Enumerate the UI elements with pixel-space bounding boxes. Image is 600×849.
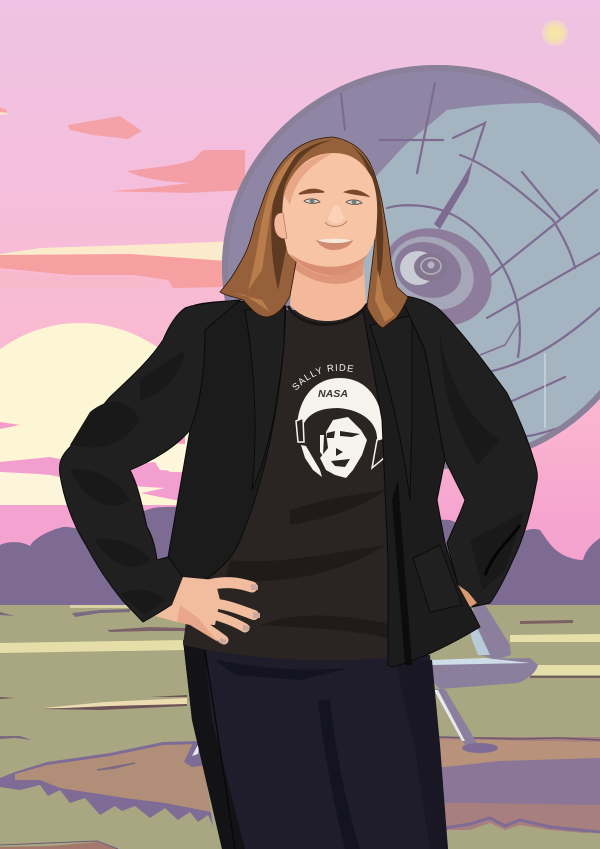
dish legs (434, 689, 477, 745)
helmet right ear muff (372, 438, 384, 468)
dish inner surface (364, 103, 600, 469)
right eyebrow (345, 190, 368, 196)
field stripes and streaks (0, 605, 600, 740)
left ear (274, 213, 287, 239)
trousers centre seam (318, 700, 360, 849)
sun (0, 323, 215, 593)
left eyebrow (299, 189, 324, 194)
jacket right lapel (370, 315, 412, 500)
portrait lower highlights (301, 435, 324, 477)
grass field (0, 605, 600, 849)
nose (328, 205, 344, 223)
shirt folds (225, 490, 395, 640)
jacket right front panel (362, 295, 480, 667)
t-shirt (183, 310, 397, 660)
hair highlights (232, 150, 395, 322)
trousers side panel (183, 640, 245, 849)
hair shadow strands (271, 140, 383, 290)
left hand on hip (155, 577, 260, 644)
finger nails (219, 584, 260, 644)
left eye (304, 199, 320, 203)
icon: pale moon (542, 20, 568, 46)
helmet dome (297, 378, 383, 465)
shirt text: SALLY RIDE (296, 371, 356, 391)
jacket left body panel (168, 301, 286, 590)
trousers (183, 640, 448, 849)
dish centre feed (390, 228, 492, 325)
t-shirt collar (288, 304, 367, 324)
jacket left lapel (245, 308, 285, 490)
distant tree line (0, 507, 600, 610)
soil patch left (0, 741, 213, 849)
helmet left ear muff (296, 418, 304, 442)
horizon cloud bands (0, 422, 200, 560)
dish foot (462, 743, 498, 753)
hair (220, 137, 408, 328)
jacket pocket (413, 545, 462, 612)
left foot of mount (184, 740, 207, 767)
dish base bowl (430, 658, 538, 689)
mouth (316, 238, 353, 250)
shirt graphic: Sally Ride NASA helmet (292, 364, 384, 478)
dish rings and struts (340, 82, 600, 438)
right hand tucked at hip (458, 585, 477, 607)
jacket right sleeve (400, 295, 537, 607)
right eye (346, 200, 362, 204)
neck shadow under chin (290, 250, 365, 284)
shirt text: NASA worm logo: NASA (318, 389, 348, 400)
neck (290, 255, 366, 321)
face (274, 153, 377, 276)
jacket left sleeve (59, 300, 240, 622)
portrait facial shadows (327, 431, 360, 467)
shirt graphic: Sally Ride NASA helmet: SALLY RIDE (292, 364, 354, 390)
portrait face (320, 417, 367, 478)
dish yoke arm (472, 603, 511, 660)
fingers (190, 583, 254, 640)
person (59, 136, 538, 849)
soil patch right (430, 737, 600, 833)
dish bowl (222, 65, 600, 469)
sky clouds (0, 107, 245, 288)
dish mount and legs (184, 603, 538, 767)
dish rim (225, 68, 600, 466)
radio dish (222, 65, 600, 500)
forehead and cheek shading (290, 254, 368, 276)
